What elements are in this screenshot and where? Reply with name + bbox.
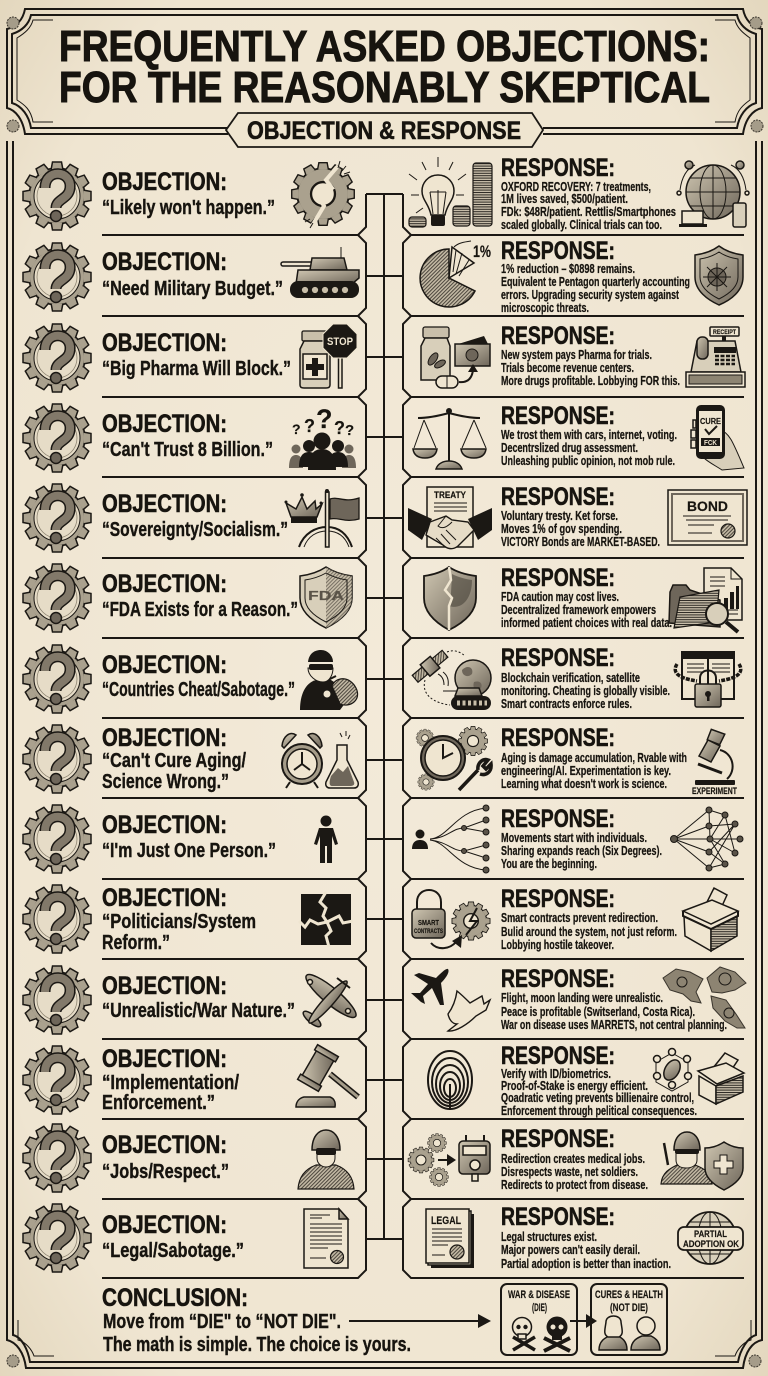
row 7 response <box>410 644 741 711</box>
response text <box>501 965 727 1032</box>
arrow: conclusion to boxes <box>349 1314 491 1328</box>
objection text: “I'm Just One Person.” <box>102 840 276 862</box>
response text: FDA caution may cost lives. <box>501 589 619 604</box>
response text <box>501 564 672 630</box>
icon: person silhouette <box>314 816 338 863</box>
response text: 1% reduction – $0898 remains. <box>501 261 635 276</box>
icon: balance scales <box>413 408 486 469</box>
icon: FDA shield: FDA <box>308 588 345 603</box>
objection text: “Unrealistic/War Nature.” <box>102 1000 295 1022</box>
objection text <box>102 329 291 380</box>
icon: light bulb and coins <box>409 157 492 227</box>
objection text: “Politicians/System <box>102 911 256 933</box>
response text: Legal structures exist. <box>501 1229 597 1244</box>
icon: person with branching network <box>412 805 489 873</box>
objection text: OBJECTION: <box>102 1131 227 1159</box>
icon: crowd with question marks: ? <box>334 418 345 438</box>
response text: informed patient choices with real data. <box>501 615 672 630</box>
objection text: “Big Pharma Will Block.” <box>102 358 291 380</box>
box: war and disease <box>501 1284 577 1355</box>
response text: Verify with ID/biometrics. <box>501 1066 611 1081</box>
row 14 objection <box>23 1204 348 1272</box>
conclusion text <box>102 1284 411 1356</box>
icon: legal stack of papers: LEGAL <box>431 1215 461 1227</box>
response text: RESPONSE: <box>501 644 615 672</box>
objection text: OBJECTION: <box>102 651 227 679</box>
row 9 objection <box>23 805 338 873</box>
objection text: OBJECTION: <box>102 1211 227 1239</box>
response text: Voluntary tresty. Ket forse. <box>501 508 618 523</box>
icon: bottle and stop sign <box>300 324 357 388</box>
response text: scaled globally. Clinical trials can too. <box>501 217 662 232</box>
response text <box>501 402 677 468</box>
icon: microscope <box>692 728 737 796</box>
objection text: Reform.” <box>102 932 170 954</box>
objection text: “FDA Exists for a Reason.” <box>102 599 298 621</box>
icon: soldier and medical shield <box>661 1132 743 1190</box>
row 9 response <box>412 805 743 873</box>
response text: Learning what doesn't work is science. <box>501 776 667 791</box>
objection text: OBJECTION: <box>102 410 227 438</box>
response text <box>501 1042 697 1118</box>
objection text <box>102 570 298 621</box>
icon: treaty and handshake <box>408 487 492 549</box>
icon: masked thief with sack <box>300 650 358 710</box>
objection text: OBJECTION: <box>102 811 227 839</box>
row 12 response <box>428 1042 744 1118</box>
objection text <box>102 884 256 954</box>
response text: Decentralized framework empowers <box>501 602 656 617</box>
response text: Sharing expands reach (Six Degrees). <box>501 843 662 858</box>
icon: tank <box>281 247 359 298</box>
response text: Bulid around the system, not just reform. <box>501 924 677 939</box>
icon: question gear <box>23 805 91 873</box>
icon: partial adoption globe badge: PARTIAL <box>694 1229 727 1239</box>
row 7 objection <box>23 645 358 713</box>
response text: engineering/AI. Experimentation is key. <box>501 763 671 778</box>
icon: question gear <box>23 1204 91 1272</box>
icon: woman <box>599 1316 627 1350</box>
response text: RESPONSE: <box>501 237 615 265</box>
response text <box>501 1125 648 1192</box>
conclusion text: Move from “DIE" to “NOT DIE". <box>103 1311 341 1333</box>
conclusion text: The math is simple. The choice is yours. <box>103 1334 411 1356</box>
objection text: “Sovereignty/Socialism.” <box>102 519 288 541</box>
icon: FDA shield <box>300 567 352 628</box>
icon: pie chart with 1 percent slice <box>420 241 491 307</box>
icon: gears to medical device <box>408 1133 490 1187</box>
response text: microscopic threats. <box>501 300 589 315</box>
objection text: “Can't Cure Aging/ <box>102 750 246 772</box>
objection text <box>102 972 295 1022</box>
objection text: Science Wrong.” <box>102 771 229 793</box>
response text: RESPONSE: <box>501 483 615 511</box>
objection text <box>102 168 275 219</box>
icon: crowd with question marks <box>289 404 356 470</box>
icon: alarm clock and flask <box>282 731 358 788</box>
icon: microscope: EXPERIMENT <box>692 786 737 796</box>
conclusion text: CONCLUSION: <box>102 1284 248 1312</box>
objection text <box>102 490 288 541</box>
response text <box>501 483 660 549</box>
icon: fingerprint <box>428 1051 472 1110</box>
objection text: OBJECTION: <box>102 884 227 912</box>
response text: RESPONSE: <box>501 1125 615 1153</box>
response text: Aging is damage accumulation, Rvable with <box>501 750 687 765</box>
objection text <box>102 651 295 701</box>
icon: chained book with padlock <box>675 652 741 707</box>
response text <box>501 644 670 711</box>
icon: question gear <box>23 645 91 713</box>
icon: partial adoption globe badge: ADOPTION OK <box>683 1239 739 1249</box>
icon: shield with virus <box>695 246 743 305</box>
response text: Lobbying hostile takeover. <box>501 937 614 952</box>
icon: phone in hand: CURE <box>700 417 722 426</box>
row 6 objection <box>23 564 352 632</box>
icon: propeller warplane <box>301 969 361 1029</box>
icon: crowd with question marks: ? <box>316 404 332 434</box>
icon: clock, gears and wrench <box>416 726 491 790</box>
objection text: OBJECTION: <box>102 724 227 752</box>
box: cures and health: (NOT DIE) <box>610 1302 648 1314</box>
row 3 response <box>421 322 745 388</box>
response text: Redirects to protect from disease. <box>501 1177 648 1192</box>
row 13 objection <box>23 1124 354 1192</box>
icon: soldier <box>298 1130 354 1189</box>
response text <box>501 805 662 871</box>
icon: cash register <box>686 327 745 387</box>
response text: FDk: $48R/patient. Rettlis/Smartphones <box>501 204 676 219</box>
icon: smart contract lock and gear: CONTRACTS <box>414 928 443 935</box>
response text: OXFORD RECOVERY: 7 treatments, <box>501 179 651 194</box>
row 2 objection <box>23 243 359 311</box>
icon: partial adoption globe badge <box>678 1212 743 1264</box>
row 11 objection <box>23 966 361 1034</box>
icon: smart contract lock and gear <box>412 890 490 948</box>
response text: VICTORY Bonds are MARKET-BASED. <box>501 534 660 549</box>
objection text: “Likely won't happen.” <box>102 197 275 219</box>
row 12 objection <box>23 1045 358 1114</box>
row 1 response <box>409 154 749 232</box>
icon: crowd with question marks: ? <box>304 416 315 436</box>
response text <box>501 154 676 232</box>
icon: phone in hand <box>691 405 744 470</box>
icon: question gear <box>23 966 91 1034</box>
response text: Unleashing public opinion, not mob rule. <box>501 453 675 468</box>
response text: Flight, moon landing were unrealistic. <box>501 990 663 1005</box>
objection text: Enforcement.” <box>102 1092 215 1114</box>
objection text <box>102 1211 244 1262</box>
response text: RESPONSE: <box>501 1042 615 1070</box>
objection text: OBJECTION: <box>102 248 227 276</box>
row 4 response <box>413 402 744 470</box>
response text: We trost them with cars, internet, voting. <box>501 427 677 442</box>
row 11 response <box>411 965 746 1032</box>
icon: pill bottle and money <box>421 327 490 388</box>
response text: RESPONSE: <box>501 724 615 752</box>
icon: question gear <box>23 564 91 632</box>
icon: question gear <box>23 1124 91 1192</box>
objection text: OBJECTION: <box>102 570 227 598</box>
objection text <box>102 410 273 461</box>
response text: Movements start with individuals. <box>501 830 647 845</box>
objection text: OBJECTION: <box>102 329 227 357</box>
icon: crown and flag <box>284 489 359 547</box>
box: war and disease: (DIE) <box>532 1302 547 1314</box>
icon: document with seal <box>304 1209 348 1268</box>
icon: bond certificate <box>668 490 747 545</box>
response text: RESPONSE: <box>501 402 615 430</box>
icon: question gear <box>23 404 91 472</box>
icon: satellite, globe and tank <box>410 648 491 710</box>
response text: Proof-of-Stake is energy efficient. <box>501 1078 648 1093</box>
response text: errors. Upgrading security system against <box>501 287 679 302</box>
arrow: between boxes <box>570 1314 597 1328</box>
title frame <box>7 9 762 134</box>
response text: RESPONSE: <box>501 154 615 182</box>
row 2 response <box>420 237 743 315</box>
icon: broken black puzzle <box>299 892 353 947</box>
icon: question gear <box>23 243 91 311</box>
objection text <box>102 1045 239 1114</box>
icon: broken gear <box>292 161 354 228</box>
objection text: OBJECTION: <box>102 490 227 518</box>
response text: New system pays Pharma for trials. <box>501 347 652 362</box>
icon: smart contract lock and gear: SMART <box>418 920 440 927</box>
objection text: “Implementation/ <box>102 1072 239 1094</box>
response text: Decentrslized drug assessment. <box>501 440 638 455</box>
objection text: “Need Military Budget.” <box>102 278 283 300</box>
box: cures and health: CURES & HEALTH <box>595 1289 663 1301</box>
response text: Trials become revenue centers. <box>501 360 634 375</box>
response text: You are the beginning. <box>501 856 597 871</box>
objection text: OBJECTION: <box>102 1045 227 1073</box>
icon: crowd with question marks: ? <box>292 421 301 437</box>
row 5 objection <box>23 484 359 552</box>
box: war and disease: WAR & DISEASE <box>508 1289 570 1301</box>
icon: bottle and stop sign: STOP <box>327 336 353 348</box>
objection text <box>102 811 276 862</box>
objection text <box>102 248 283 300</box>
response text: RESPONSE: <box>501 1203 615 1231</box>
icon: airplane and dove <box>411 969 490 1031</box>
icon: pie chart with 1 percent slice: 1% <box>473 242 491 261</box>
response text: RESPONSE: <box>501 885 615 913</box>
row 5 response <box>408 483 747 549</box>
row 4 objection <box>23 404 356 472</box>
row 10 response <box>412 885 738 952</box>
response text: 1M lives saved, $500/patient. <box>501 191 628 206</box>
icon: ballot box <box>683 888 738 951</box>
response text: RESPONSE: <box>501 805 615 833</box>
row 3 objection <box>23 324 357 392</box>
icon: treaty and handshake: TREATY <box>434 490 466 500</box>
objection text: “Jobs/Respect.” <box>102 1161 229 1183</box>
response text <box>501 1203 671 1271</box>
row 10 objection <box>23 884 353 954</box>
icon: question gear <box>23 725 91 793</box>
row 6 response <box>424 564 742 632</box>
objection text: OBJECTION: <box>102 168 227 196</box>
icon: question gear <box>23 162 91 230</box>
banner: objection and response: OBJECTION & RESPONSE <box>247 117 521 145</box>
objection text: “Can't Trust 8 Billion.” <box>102 439 273 461</box>
response text: RESPONSE: <box>501 564 615 592</box>
row 14 response <box>426 1203 743 1271</box>
response text: Redirection creates medical jobs. <box>501 1151 645 1166</box>
icon: legal stack of papers <box>426 1209 474 1268</box>
response text: Smart contracts prevent redirection. <box>501 910 658 925</box>
row 8 objection <box>23 724 358 793</box>
objection text: OBJECTION: <box>102 972 227 1000</box>
response text: Partial adoption is better than inaction. <box>501 1256 671 1271</box>
icon: bond certificate: BOND <box>687 498 728 514</box>
central spine with connectors and row outlines <box>102 194 744 1278</box>
icon: question gear <box>23 1046 91 1114</box>
icon: staking network and ballot box <box>654 1048 744 1104</box>
icon: black skull <box>544 1316 570 1351</box>
icon: folder and magnifier <box>669 568 742 632</box>
icon: cracked shield <box>424 567 476 630</box>
objection text: “Countries Cheat/Sabotage.” <box>102 679 295 701</box>
row 13 response <box>408 1125 743 1192</box>
box: cures and health <box>591 1284 667 1355</box>
title <box>59 22 710 112</box>
row 1 objection <box>23 161 354 230</box>
response text: Blockchain verification, satellite <box>501 670 640 685</box>
objection text: “Legal/Sabotage.” <box>102 1240 244 1262</box>
response text <box>501 724 687 791</box>
response text: Moves 1% of gov spending. <box>501 521 622 536</box>
icon: question gear <box>23 484 91 552</box>
response text: More drugs profitable. Lobbying FOR this. <box>501 373 680 388</box>
objection text <box>102 1131 229 1183</box>
response text: RESPONSE: <box>501 322 615 350</box>
icon: outlined skull <box>512 1318 535 1350</box>
response text: monitoring. Cheating is globally visible. <box>501 683 670 698</box>
icon: globe with devices <box>677 161 749 227</box>
response text <box>501 237 690 315</box>
icon: question gear <box>23 885 91 953</box>
icon: phone in hand: FCK <box>704 440 717 447</box>
icon: country maps <box>663 967 746 1028</box>
row 8 response <box>416 724 737 796</box>
response text: RESPONSE: <box>501 965 615 993</box>
response text <box>501 885 677 952</box>
response text <box>501 322 680 388</box>
icon: man <box>631 1317 660 1350</box>
icon: question gear <box>23 324 91 392</box>
response text: Smart contracts enforce rules. <box>501 696 632 711</box>
response text: Disrespects waste, net soldiers. <box>501 1164 638 1179</box>
icon: cash register: RECEIPT <box>713 330 736 336</box>
objection text <box>102 724 246 793</box>
icon: crowd with question marks: ? <box>345 422 354 439</box>
icon: network graph <box>670 807 743 871</box>
response text: Major powers can't easily derail. <box>501 1242 640 1257</box>
icon: gavel <box>296 1045 358 1107</box>
